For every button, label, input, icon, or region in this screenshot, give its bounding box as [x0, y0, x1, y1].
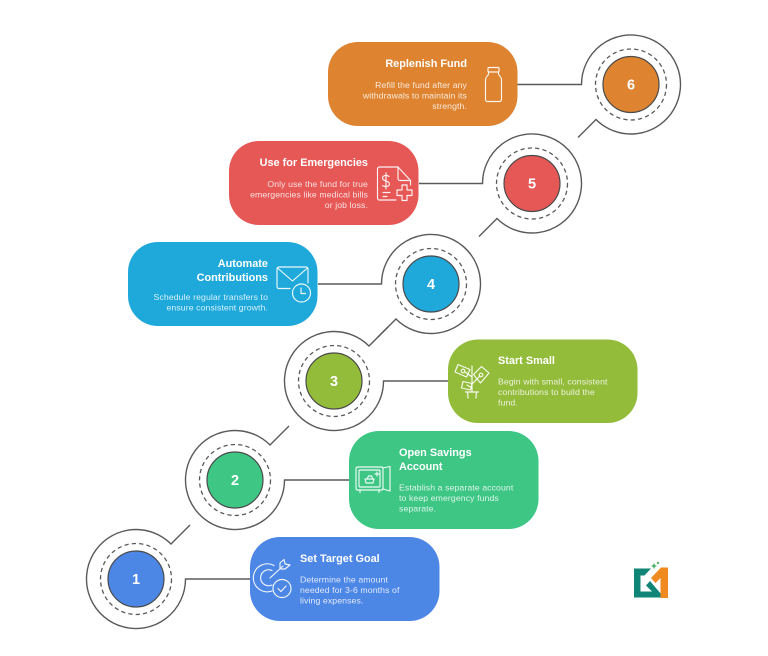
text: savings description: separate. [399, 504, 436, 514]
text: savings description: Establish a separate account [399, 482, 514, 492]
text: target description: living expenses. [300, 596, 363, 606]
icon: target and check [253, 560, 291, 598]
text: savings description: to keep emergency funds [399, 493, 499, 503]
icon: medical bill [378, 167, 412, 200]
text: replenish description: strength. [432, 101, 467, 111]
logo [634, 562, 668, 598]
step 6: number node [517, 35, 680, 138]
heading: replenish fund: Replenish Fund [385, 58, 467, 70]
step 1: number node: 1 [132, 572, 140, 588]
step 3: number node: 3 [330, 374, 338, 390]
panel: replenish fund [328, 42, 518, 126]
text: target description: needed for 3-6 months of [300, 585, 400, 595]
step 5: number node: 5 [528, 176, 536, 192]
heading: automate contributions: Contributions [197, 272, 268, 284]
step 1: number node [87, 525, 250, 629]
panel: automate contributions [128, 242, 318, 326]
text: emergencies description: emergencies like medical bills [250, 190, 369, 200]
text: replenish description: withdrawals to maintain its [362, 90, 468, 100]
heading: open savings account: Account [399, 461, 443, 473]
panel: open savings account [349, 431, 538, 529]
panel: start small [448, 340, 638, 423]
text: start small description: Begin with small, consistent [498, 376, 608, 386]
icon: money plant [455, 364, 489, 398]
text: emergencies description: Only use the fund for true [267, 179, 368, 189]
heading: start small: Start Small [498, 355, 555, 367]
step 2: number node [186, 426, 349, 530]
heading: open savings account: Open Savings [399, 447, 472, 459]
panel: use for emergencies [229, 141, 418, 225]
panel: set target goal [250, 537, 440, 621]
text: replenish description: Refill the fund after any [375, 80, 468, 90]
text: target description: Determine the amount [300, 574, 388, 584]
step 6: number node: 6 [627, 78, 635, 94]
icon: bottle [486, 68, 502, 102]
icon: open safe [356, 466, 390, 492]
text: start small description: fund. [498, 398, 518, 408]
icon: envelope and clock [277, 267, 310, 302]
step 4: number node: 4 [427, 277, 435, 293]
text: automate description: ensure consistent growth. [166, 302, 268, 312]
text: automate description: Schedule regular transfers to [154, 292, 268, 302]
heading: set target goal: Set Target Goal [300, 553, 380, 565]
step 3: number node [284, 327, 448, 431]
step 5: number node [419, 134, 582, 236]
text: emergencies description: or job loss. [325, 200, 368, 210]
step 4: number node [318, 234, 481, 337]
heading: automate contributions: Automate [218, 258, 268, 270]
heading: use for emergencies: Use for Emergencies [260, 157, 368, 169]
text: start small description: contributions to build the [498, 387, 595, 397]
step 2: number node: 2 [231, 473, 239, 489]
